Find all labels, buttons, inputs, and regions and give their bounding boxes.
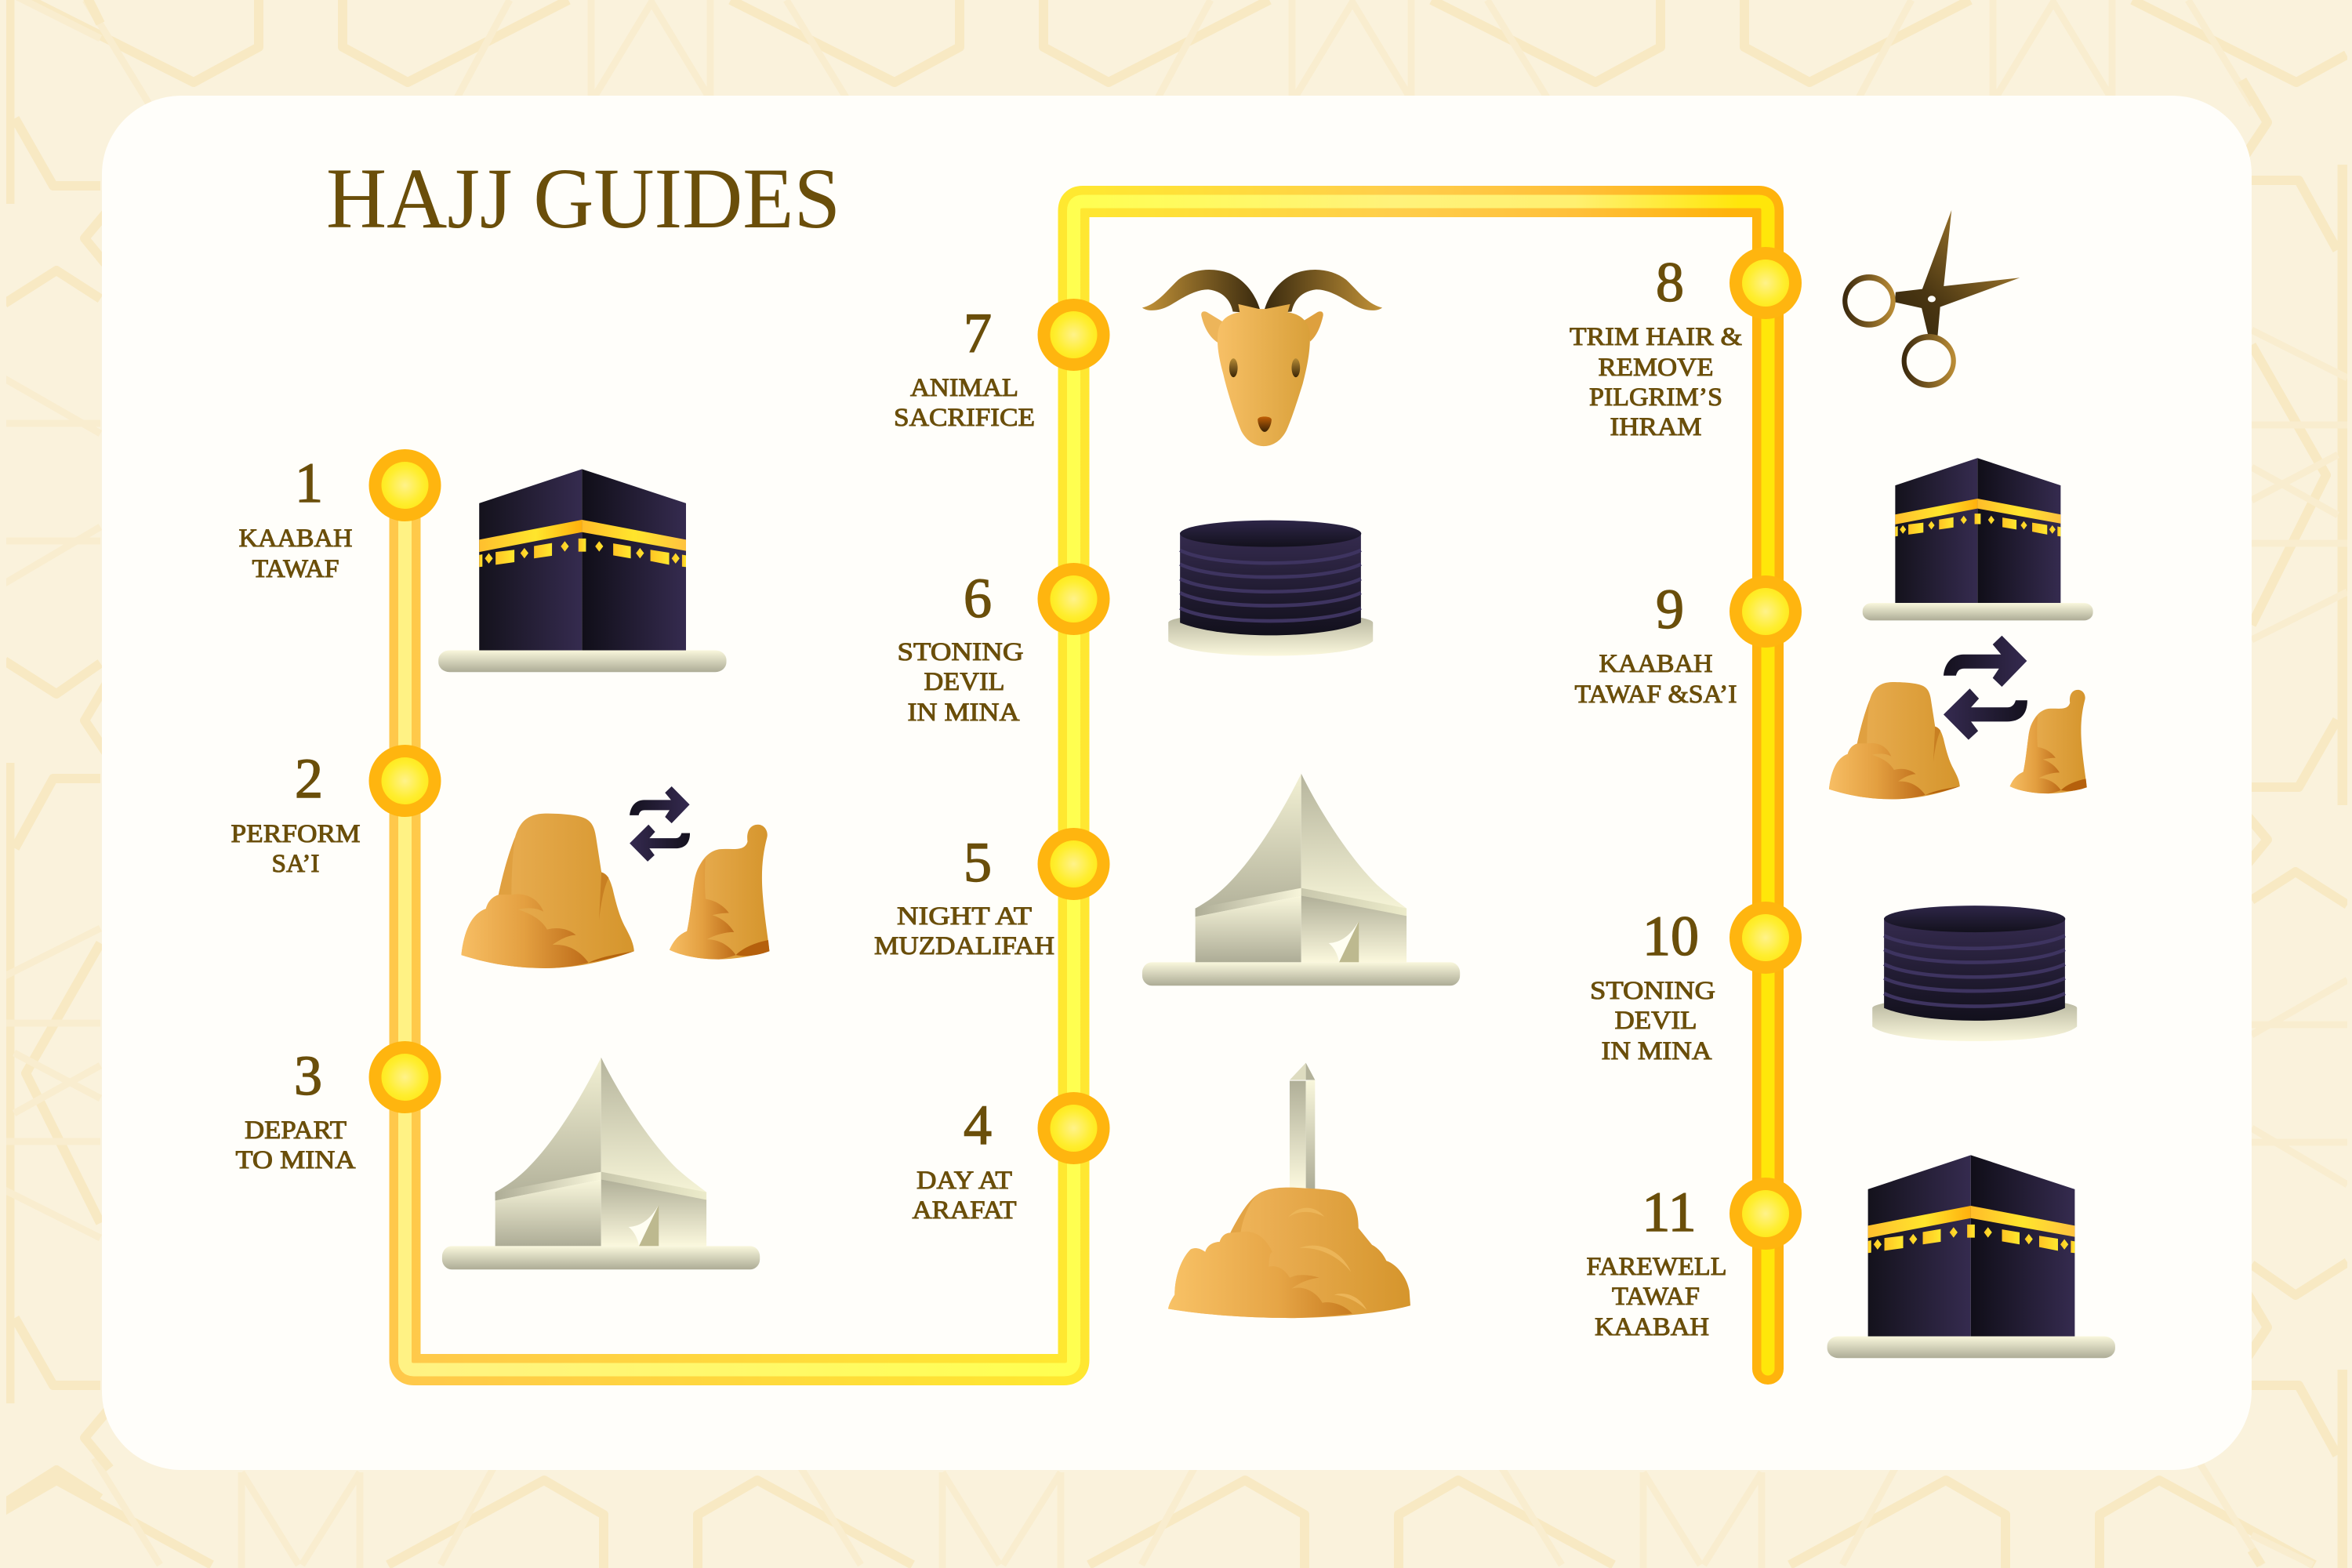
label 8: REMOVE (1598, 354, 1714, 382)
node 8 (1730, 247, 1802, 319)
number 8: 8 (1656, 251, 1684, 314)
node 2 (368, 745, 441, 817)
node 9 (1730, 575, 1802, 648)
icon: kaaba (1828, 1155, 2115, 1358)
icon: goat head (1142, 270, 1382, 446)
label 6: IN MINA (908, 699, 1020, 727)
label 10: DEVIL (1615, 1007, 1697, 1035)
node 11 (1730, 1178, 1802, 1250)
label 8: TRIM HAIR & (1570, 323, 1742, 351)
title: HAJJ GUIDES (326, 151, 840, 246)
label 2: SA’I (271, 850, 320, 878)
label 7: SACRIFICE (894, 404, 1035, 432)
icon: jamarat pillar (1872, 906, 2077, 1041)
step 3: Depart to Mina (235, 1041, 760, 1269)
label 2: PERFORM (230, 820, 361, 848)
number 11: 11 (1642, 1181, 1697, 1243)
node 5 (1038, 828, 1110, 900)
step 5: Night at Muzdalifah (874, 774, 1460, 985)
step 9: Kaabah Tawaf and Sa'i (1574, 458, 2093, 799)
step 6: Stoning Devil in Mina (897, 521, 1373, 727)
step 2: Perform Sa'i (230, 745, 769, 968)
step 1: Kaabah Tawaf (238, 449, 727, 672)
label 9 (1574, 650, 1737, 709)
label 11 (1587, 1253, 1726, 1341)
number 4: 4 (964, 1094, 992, 1156)
label 7 (894, 374, 1035, 432)
step 7: Animal Sacrifice (894, 270, 1382, 446)
label 10: IN MINA (1601, 1037, 1712, 1065)
step 11: Farewell Tawaf Kaabah (1587, 1155, 2115, 1358)
label 3 (235, 1116, 356, 1174)
label 2 (230, 820, 361, 878)
node 3 (368, 1041, 441, 1113)
label 8: PILGRIM’S (1589, 383, 1722, 412)
step 8: Trim Hair and Remove Pilgrim's Ihram (1570, 210, 2020, 441)
label 9: TAWAF &SA’I (1574, 681, 1737, 709)
number 2: 2 (295, 747, 323, 810)
icon: hill with pillar (1168, 1063, 1410, 1318)
number 10: 10 (1642, 905, 1699, 967)
icon: kaaba (438, 469, 727, 672)
label 4 (913, 1167, 1016, 1225)
node 6 (1038, 563, 1110, 635)
icon: jamarat pillar (1168, 521, 1373, 656)
number 5: 5 (964, 831, 992, 894)
label 11: KAABAH (1595, 1313, 1709, 1341)
label 1: KAABAH (238, 524, 353, 553)
icon: tent (442, 1058, 760, 1269)
label 1 (238, 524, 353, 583)
label 1: TAWAF (252, 555, 339, 583)
icon: tent (1142, 774, 1460, 985)
node 10 (1730, 902, 1802, 974)
icon: kaaba (1863, 458, 2093, 620)
label 6 (897, 638, 1024, 727)
label 10: STONING (1590, 977, 1715, 1005)
node 7 (1038, 299, 1110, 371)
icon: Safa and Marwa hills with arrows (1829, 636, 2087, 799)
number 1: 1 (295, 452, 323, 514)
step 4: Day at Arafat (913, 1063, 1410, 1318)
label 6: DEVIL (924, 668, 1005, 696)
number 7: 7 (964, 302, 992, 365)
label 7: ANIMAL (910, 374, 1018, 402)
label 8 (1570, 323, 1742, 441)
label 4: DAY AT (916, 1167, 1012, 1195)
label 5 (874, 902, 1054, 960)
label 3: TO MINA (235, 1146, 356, 1174)
label 5: MUZDALIFAH (874, 932, 1054, 960)
step 10: Stoning Devil in Mina (1590, 902, 2077, 1065)
label 8: IHRAM (1610, 413, 1701, 441)
label 9: KAABAH (1599, 650, 1712, 678)
label 6: STONING (897, 638, 1024, 666)
timeline path (405, 201, 1768, 1370)
icon: scissors (1845, 210, 2020, 385)
number 6: 6 (964, 567, 992, 630)
label 11: TAWAF (1612, 1283, 1700, 1311)
label 10 (1590, 977, 1715, 1065)
number 3: 3 (294, 1044, 322, 1107)
label 3: DEPART (245, 1116, 347, 1145)
node 4 (1038, 1092, 1110, 1164)
label 5: NIGHT AT (897, 902, 1032, 931)
icon: Safa and Marwa hills with arrows (461, 786, 769, 968)
node 1 (368, 449, 441, 521)
number 9: 9 (1656, 578, 1684, 641)
label 4: ARAFAT (913, 1196, 1016, 1225)
label 11: FAREWELL (1587, 1253, 1726, 1281)
